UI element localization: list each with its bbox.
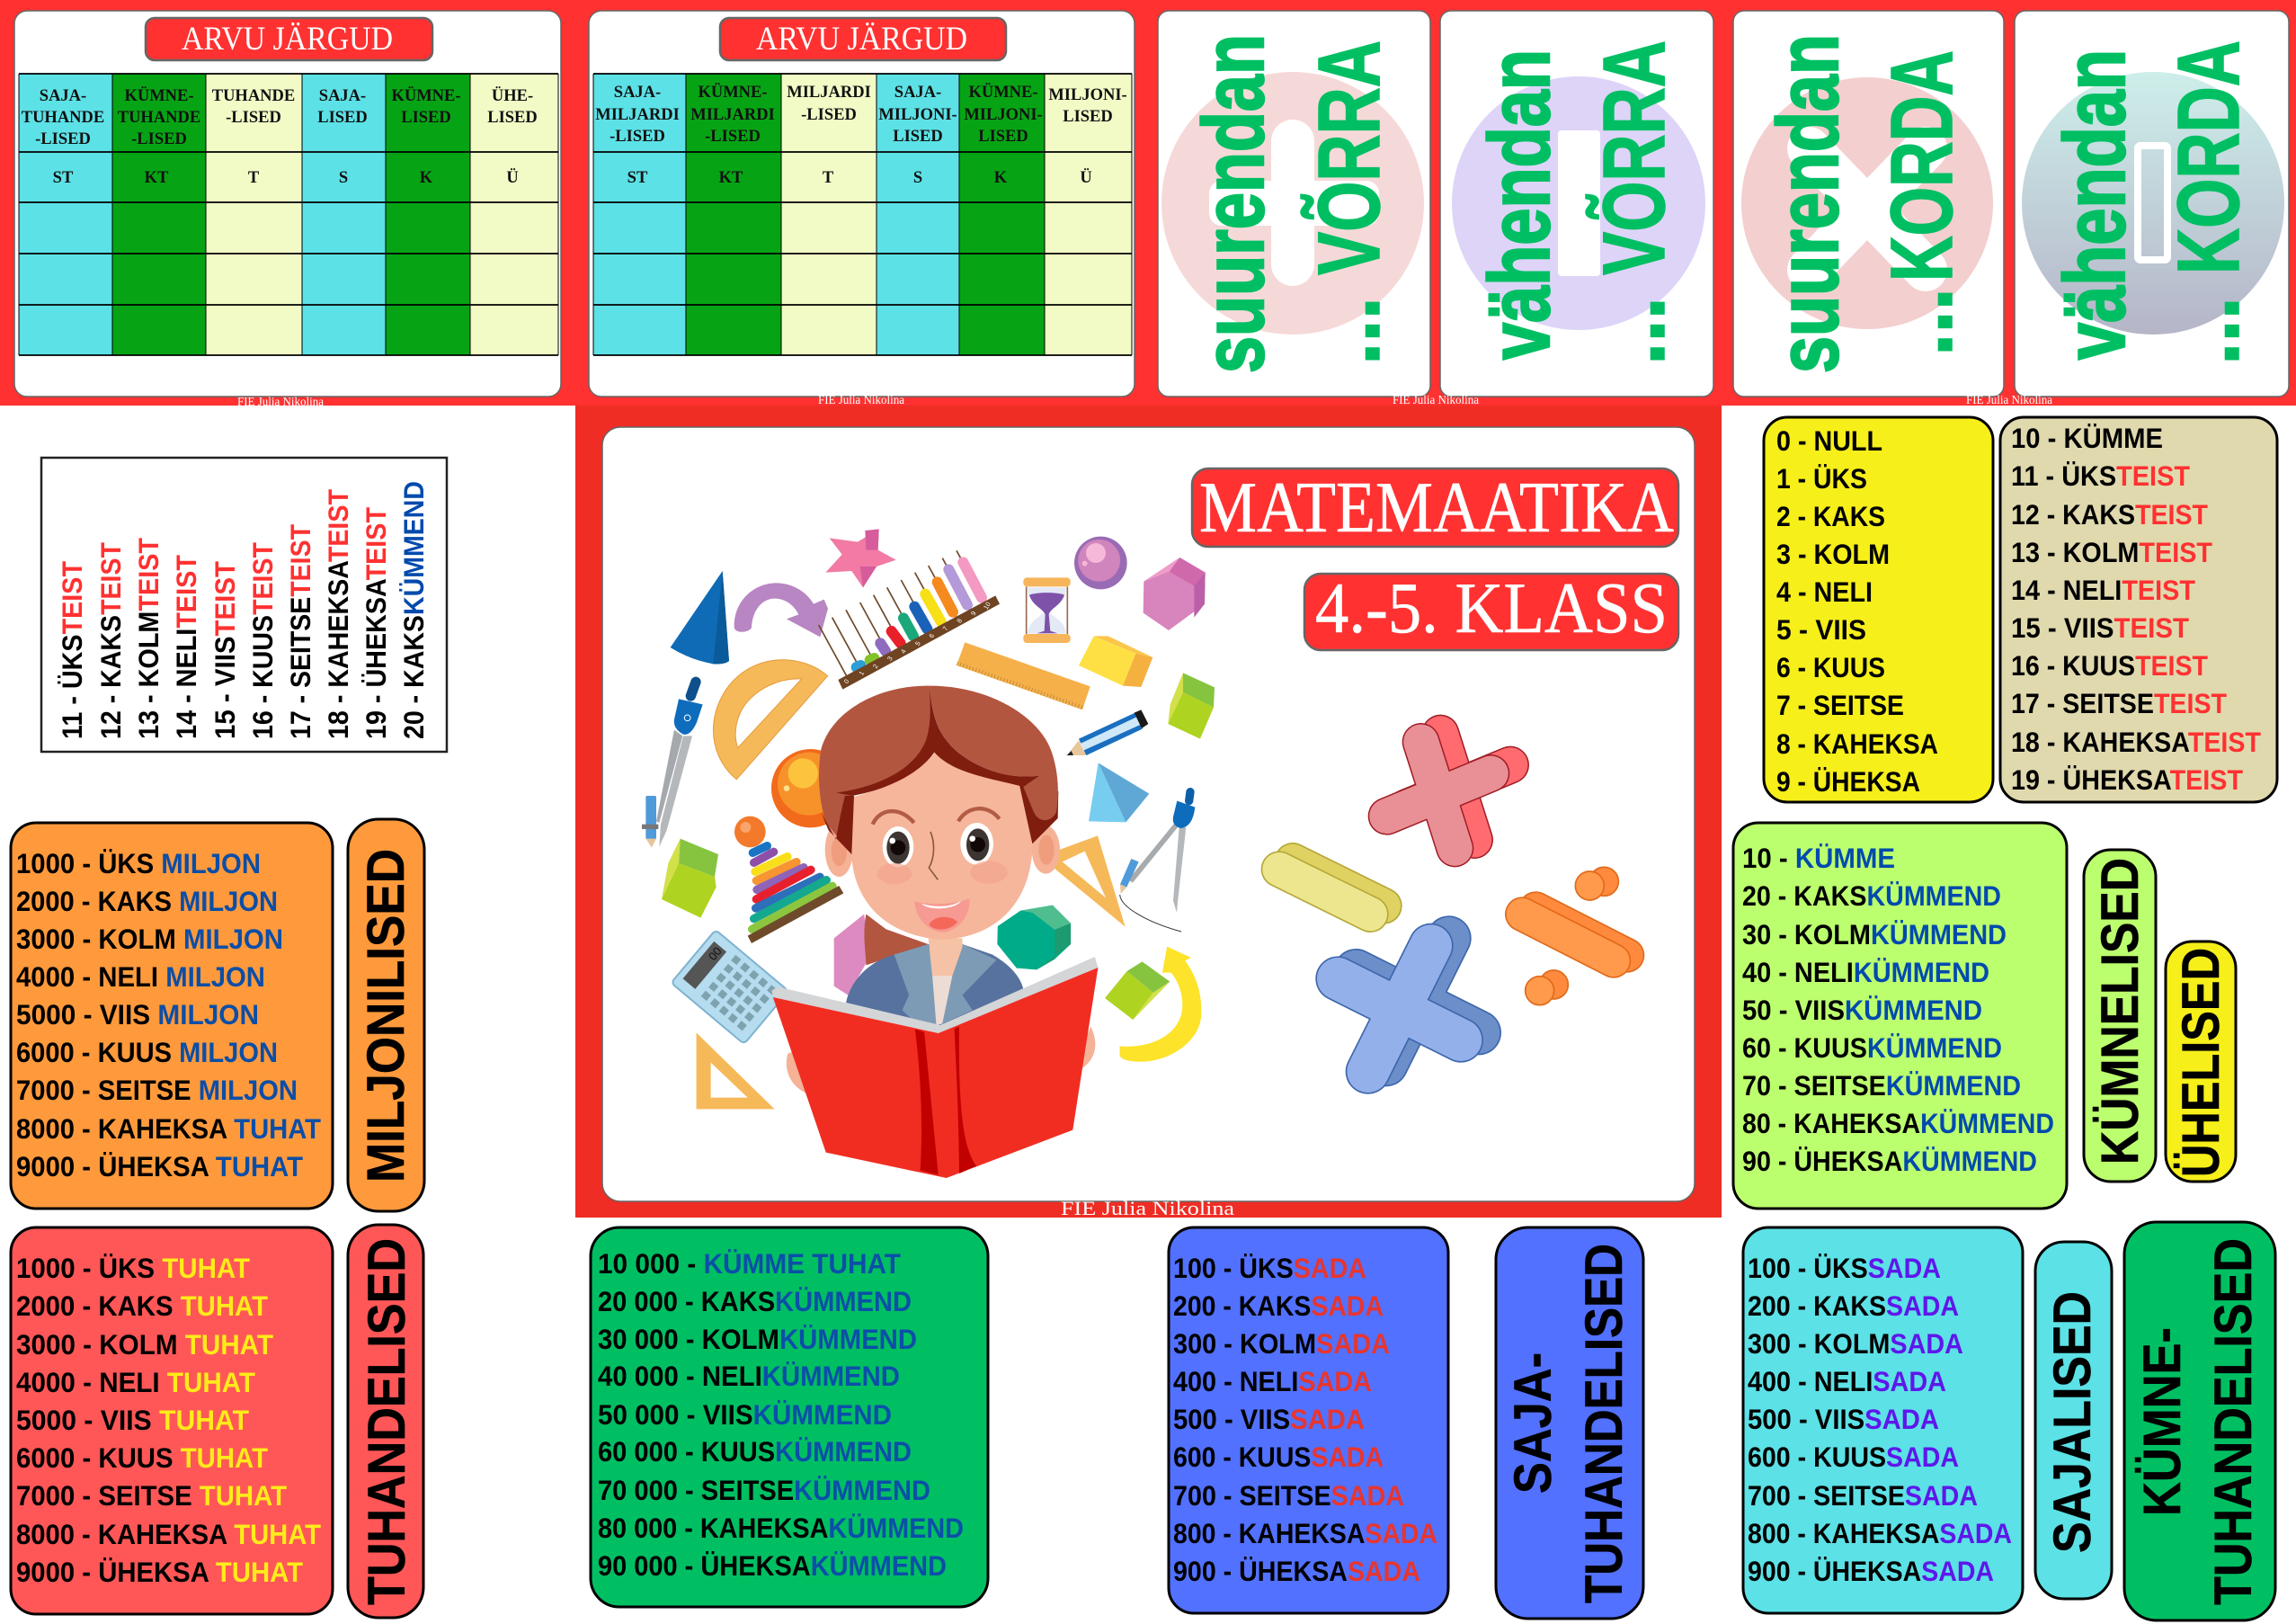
label: sajalised <box>2035 1242 2112 1599</box>
panel: millions list: 3000 - KOLM MILJON <box>16 923 283 955</box>
panel: units list: 9 - ÜHEKSA <box>1776 765 1920 798</box>
face <box>851 753 1032 940</box>
icon: abacus: 8 <box>955 617 964 624</box>
icon: green cube bottom <box>1105 961 1170 1020</box>
table: thousands place values: LISED <box>401 109 451 127</box>
table: billions place values: SAJA- <box>614 84 661 102</box>
icon: yellow box <box>1079 636 1152 687</box>
card: suurendan vorra: ... <box>1300 297 1398 365</box>
panel: teens list khaki: 18 - KAHEKSATEIST <box>2011 726 2261 758</box>
panel: hundreds list blue: 500 - VIISSADA <box>1173 1403 1365 1435</box>
table: thousands place values: SAJA- <box>319 87 366 105</box>
cheeks <box>877 861 1008 884</box>
panel: units list: 8 - KAHEKSA <box>1776 727 1938 760</box>
label: saja-tuhandelised: SAJA- <box>1504 1352 1562 1494</box>
panel: hundreds list blue: 200 - KAKSSADA <box>1173 1289 1384 1322</box>
panel: units list: 4 - NELI <box>1776 576 1873 608</box>
icon: red plus <box>1387 734 1510 848</box>
panel: rotated teens list: 13 - KOLMTEIST <box>132 538 165 739</box>
table: thousands place values: ST <box>53 169 74 187</box>
panel: thousands list: 8000 - KAHEKSA TUHAT <box>16 1518 321 1550</box>
label: uhelised: ÜHELISED <box>2172 948 2230 1177</box>
icon: blue times <box>1338 938 1479 1072</box>
panel: hundreds list blue: 800 - KAHEKSASADA <box>1173 1517 1437 1549</box>
table: thousands place values: -LISED <box>131 130 187 148</box>
panel: millions list: 1000 - ÜKS MILJON <box>16 847 261 879</box>
panel: units list: 0 - NULL <box>1776 424 1882 457</box>
title: matemaatika: MATEMAATIKA <box>1199 468 1674 548</box>
panel: units list: 2 - KAKS <box>1776 500 1885 532</box>
panel: tens list: 10 - KÜMME <box>1742 842 1895 874</box>
panel: millions list: 9000 - ÜHEKSA TUHAT <box>16 1150 303 1182</box>
table: billions place values: S <box>913 169 922 187</box>
panel: teens list khaki: 11 - ÜKSTEIST <box>2011 460 2190 492</box>
panel: rotated teens list: 17 - SEITSETEIST <box>284 524 316 739</box>
table: thousands place values: K <box>420 169 433 187</box>
panel: hundreds list cyan: 800 - KAHEKSASADA <box>1748 1517 2012 1549</box>
table: thousands place values: LISED <box>317 109 368 127</box>
panel: ten thousands list: 10 000 - KÜMME TUHAT <box>598 1247 901 1280</box>
panel: hundreds list blue <box>1169 1227 1448 1613</box>
panel: millions list: 7000 - SEITSE MILJON <box>16 1074 298 1106</box>
panel: millions list <box>11 823 333 1209</box>
table: billions place values: LISED <box>893 128 943 146</box>
icon: ruler <box>957 642 1090 709</box>
icon: abacus: 4 <box>899 647 908 655</box>
label: sajalised: SAJALISED <box>2043 1291 2102 1553</box>
table: billions place values: LISED <box>978 128 1028 146</box>
panel: tens list: 40 - NELIKÜMMEND <box>1742 956 1989 988</box>
panel: thousands list <box>11 1227 333 1614</box>
panel: rotated teens list <box>41 458 447 752</box>
panel: rotated teens list: 18 - KAHEKSATEIST <box>322 489 354 739</box>
table: thousands place values: Ü <box>506 168 519 187</box>
icon: abacus <box>819 550 1000 690</box>
table: billions place values: KT <box>719 169 743 187</box>
label: saja-tuhandelised: TUHANDELISED <box>1575 1244 1633 1603</box>
panel: millions list: 6000 - KUUS MILJON <box>16 1036 278 1068</box>
table: billions place values: MILJARDI <box>690 106 775 124</box>
icon: pyramid <box>1089 763 1149 822</box>
panel: hundreds list cyan: 700 - SEITSESADA <box>1748 1479 1978 1512</box>
jacket <box>846 938 1023 1025</box>
icon: abacus: 3 <box>885 655 894 662</box>
icon: yellow arrow <box>1120 947 1201 1062</box>
panel: hundreds list cyan: 600 - KUUSSADA <box>1748 1441 1959 1473</box>
table: thousands place values: SAJA- <box>40 87 86 105</box>
panel: ten thousands list: 50 000 - VIISKÜMMEND <box>598 1398 892 1431</box>
panel: tens list: 50 - VIISKÜMMEND <box>1742 994 1982 1026</box>
icon: calculator <box>672 930 788 1044</box>
panel: hundreds list blue: 700 - SEITSESADA <box>1173 1479 1404 1512</box>
panel: ten thousands list: 60 000 - KUUSKÜMMEND <box>598 1435 912 1468</box>
panel: hundreds list blue: 300 - KOLMSADA <box>1173 1327 1390 1360</box>
icon: orange divide <box>1522 867 1627 1005</box>
card: suurendan korda: ... <box>1873 288 1971 356</box>
subtitle: grade: 4.-5. KLASS <box>1315 569 1668 648</box>
title: arvu jargud: ARVU JÄRGUD <box>182 21 393 58</box>
panel: hundreds list cyan: 300 - KOLMSADA <box>1748 1327 1963 1360</box>
title: arvu jargud second: ARVU JÄRGUD <box>756 21 967 58</box>
table: thousands place values: S <box>339 169 348 187</box>
panel: hundreds list cyan: 200 - KAKSSADA <box>1748 1289 1959 1322</box>
panel: teens list khaki: 12 - KAKSTEIST <box>2011 498 2208 531</box>
icon: abacus: 9 <box>969 610 978 617</box>
panel: tens list: 90 - ÜHEKSAKÜMMEND <box>1742 1145 2037 1177</box>
panel: thousands list: 2000 - KAKS TUHAT <box>16 1289 268 1322</box>
icon: purple sphere <box>1074 537 1127 589</box>
table: billions place values: Ü <box>1080 168 1092 187</box>
panel: place value table thousands <box>0 0 574 409</box>
icon: purple arrow <box>734 583 828 637</box>
label: saja-tuhandelised <box>1496 1227 1643 1619</box>
table: billions place values: KÜMNE- <box>968 83 1038 102</box>
table: billions place values: SAJA- <box>894 84 941 102</box>
icon: abacus: 0 <box>842 678 850 685</box>
panel: teens list khaki: 13 - KOLMTEIST <box>2011 536 2212 568</box>
panel: rotated teens list: 15 - VIISTEIST <box>209 561 241 739</box>
icon: open red book <box>771 957 1098 1178</box>
panel: millions list: 5000 - VIIS MILJON <box>16 998 259 1031</box>
label: kumne-tuhandelised <box>2124 1222 2275 1620</box>
icon: pink hexagon <box>1144 558 1206 630</box>
icon: cone <box>671 571 729 665</box>
table: billions place values: -LISED <box>801 106 857 124</box>
panel: units list: 5 - VIIS <box>1776 613 1866 646</box>
icon: abacus: 2 <box>871 663 880 670</box>
table: billions place values: K <box>994 169 1008 187</box>
table: billions place values: MILJARDI <box>787 84 871 102</box>
table: billions place values: MILJONI- <box>878 106 957 124</box>
mouth <box>914 898 969 932</box>
panel: ten thousands list: 90 000 - ÜHEKSAKÜMMEND <box>598 1549 947 1582</box>
panel: multiply and divide cards <box>1722 0 2296 407</box>
panel: units list: 6 - KUUS <box>1776 651 1885 683</box>
panel: add and subtract cards <box>1142 0 1722 407</box>
nose <box>929 832 938 879</box>
panel: millions list: 8000 - KAHEKSA TUHAT <box>16 1112 321 1145</box>
panel: teens list khaki: 16 - KUUSTEIST <box>2011 649 2208 682</box>
label: kumne-tuhandelised: KÜMNE- <box>2133 1327 2192 1516</box>
icon: abacus: 1 <box>857 670 866 677</box>
icon: green cube <box>662 839 718 918</box>
label: tuhandelised: TUHANDELISED <box>358 1238 416 1605</box>
credit second: FIE Julia Nikolina <box>818 394 905 407</box>
panel: hundreds list cyan: 900 - ÜHEKSASADA <box>1748 1555 1994 1587</box>
panel: units list: 7 - SEITSE <box>1776 689 1904 721</box>
icon: compass drawing <box>1120 792 1195 932</box>
table: billions place values <box>593 74 1132 355</box>
panel: thousands list: 7000 - SEITSE TUHAT <box>16 1479 287 1512</box>
icon: abacus: 10 <box>982 601 992 611</box>
panel: tens list: 80 - KAHEKSAKÜMMEND <box>1742 1107 2054 1139</box>
icon: compass <box>642 682 703 848</box>
table: thousands place values: -LISED <box>226 109 281 127</box>
icon: yellow minus <box>1279 861 1384 915</box>
table: billions place values: ST <box>627 169 648 187</box>
label: miljonilised: MILJONILISED <box>357 849 415 1182</box>
panel: millions list: 2000 - KAKS MILJON <box>16 885 278 917</box>
table: thousands place values: T <box>248 169 260 187</box>
panel: rotated teens list: 12 - KAKSTEIST <box>94 542 127 739</box>
table: billions place values: MILJONI- <box>1048 86 1127 104</box>
panel: place value table billions <box>574 0 1142 407</box>
panel: units list: 1 - ÜKS <box>1776 462 1867 495</box>
panel: ten thousands list: 80 000 - KAHEKSAKÜMMEND <box>598 1512 964 1544</box>
icon: protractor <box>713 660 828 780</box>
panel: ten thousands list: 30 000 - KOLMKÜMMEND <box>598 1323 917 1355</box>
hair <box>819 686 1058 854</box>
panel: rotated teens list: 16 - KUUSTEIST <box>246 542 279 739</box>
panel: hundreds list cyan: 500 - VIISSADA <box>1748 1403 1939 1435</box>
table: thousands place values: TUHANDE <box>22 109 104 127</box>
panel: hundreds list blue: 600 - KUUSSADA <box>1173 1441 1384 1473</box>
panel: rotated teens list: 20 - KAKSKÜMMEND <box>397 481 430 739</box>
icon: ring tower <box>734 816 843 943</box>
icon: set square bottom <box>697 1032 775 1109</box>
table: thousands place values: LISED <box>487 109 538 127</box>
panel: thousands list: 1000 - ÜKS TUHAT <box>16 1252 250 1284</box>
panel: thousands list: 5000 - VIIS TUHAT <box>16 1404 249 1436</box>
icon: calculator: 00 <box>706 944 725 963</box>
panel: thousands list: 3000 - KOLM TUHAT <box>16 1328 273 1361</box>
table: billions place values: LISED <box>1063 108 1113 126</box>
panel: teens list khaki: 19 - ÜHEKSATEIST <box>2011 763 2243 796</box>
panel: ten thousands list: 20 000 - KAKSKÜMMEND <box>598 1285 912 1317</box>
panel: rotated teens list: 14 - NELITEIST <box>170 555 202 739</box>
panel: hundreds list blue: 100 - ÜKSSADA <box>1173 1252 1366 1284</box>
table: billions place values: MILJARDI <box>595 106 680 124</box>
panel: teens list khaki: 14 - NELITEIST <box>2011 574 2195 606</box>
panel: units list <box>1764 417 1993 802</box>
panel: ten thousands list: 70 000 - SEITSEKÜMMEND <box>598 1474 930 1506</box>
icon: abacus: 5 <box>913 640 922 647</box>
panel: teens list khaki: 10 - KÜMME <box>2011 422 2163 454</box>
card: vahendan korda: ... <box>2159 297 2257 365</box>
card: suurendan korda <box>1733 11 2004 397</box>
panel: tens list: 70 - SEITSEKÜMMEND <box>1742 1069 2021 1102</box>
panel: ten thousands list: 40 000 - NELIKÜMMEND <box>598 1360 900 1392</box>
illustration: math objects right <box>957 537 1215 932</box>
icon: hands <box>787 1027 1095 1094</box>
card: vahendan korda <box>2015 11 2289 397</box>
table: thousands place values: ÜHE- <box>492 86 533 105</box>
table: thousands place values: TUHANDE <box>118 109 200 127</box>
panel: tens list: 20 - KAKSKÜMMEND <box>1742 879 2001 912</box>
table: thousands place values: TUHANDE <box>212 87 295 105</box>
table: thousands place values <box>19 74 558 355</box>
icon: orange sphere <box>771 749 850 827</box>
panel: thousands list: 9000 - ÜHEKSA TUHAT <box>16 1556 303 1588</box>
illustration: girl with book lower part <box>697 906 1201 1178</box>
table: billions place values: -LISED <box>705 128 761 146</box>
credit fourth: FIE Julia Nikolina <box>1966 394 2053 407</box>
illustration: math objects left <box>642 529 1000 943</box>
icon: teal octagon <box>997 906 1071 969</box>
panel: rotated teens list: 19 - ÜHEKSATEIST <box>360 507 392 739</box>
eyebrows <box>873 808 1000 825</box>
panel: hundreds list blue: 900 - ÜHEKSASADA <box>1173 1555 1420 1587</box>
braid <box>864 915 929 965</box>
credit: FIE Julia Nikolina <box>237 396 325 409</box>
eyes <box>883 823 993 867</box>
credit cover: FIE Julia Nikolina <box>1061 1197 1234 1219</box>
table: thousands place values: -LISED <box>35 130 91 148</box>
panel: hundreds list cyan <box>1743 1227 2023 1613</box>
table: billions place values: T <box>823 169 834 187</box>
panel: millions list: 4000 - NELI MILJON <box>16 960 265 993</box>
panel: tens list: 30 - KOLMKÜMMEND <box>1742 918 2007 950</box>
illustration: math symbols <box>1279 734 1627 1072</box>
table: billions place values: -LISED <box>610 128 665 146</box>
table: thousands place values: KT <box>145 169 169 187</box>
table: thousands place values: KÜMNE- <box>391 86 461 105</box>
card: suurendan vorra <box>1158 11 1430 397</box>
icon: pencil <box>1067 709 1148 755</box>
panel: ten thousands list <box>591 1227 988 1607</box>
panel: tens list: 60 - KUUSKÜMMEND <box>1742 1031 2002 1064</box>
panel: hundreds list cyan: 400 - NELISADA <box>1748 1365 1946 1397</box>
panel: hundreds list blue: 400 - NELISADA <box>1173 1365 1372 1397</box>
icon: pink hexagon behind girl <box>834 915 870 995</box>
icon: abacus: 7 <box>941 625 949 632</box>
icon: set square <box>1052 835 1126 927</box>
icon: abacus: 6 <box>927 632 936 639</box>
icon: green cube right <box>1168 673 1215 739</box>
table: billions place values: MILJONI- <box>964 106 1043 124</box>
panel: central cover <box>575 406 1722 1219</box>
label: kumnelised: KÜMNELISED <box>2091 858 2149 1164</box>
panel: teens list khaki: 15 - VIISTEIST <box>2011 611 2189 644</box>
panel: thousands list: 4000 - NELI TUHAT <box>16 1366 255 1398</box>
panel: units list: 3 - KOLM <box>1776 538 1890 570</box>
table: thousands place values: KÜMNE- <box>124 86 194 105</box>
panel: hundreds list cyan: 100 - ÜKSSADA <box>1748 1252 1941 1284</box>
panel: teens list khaki: 17 - SEITSETEIST <box>2011 687 2227 719</box>
ears <box>825 823 1060 877</box>
credit third: FIE Julia Nikolina <box>1393 394 1480 407</box>
label: kumne-tuhandelised: TUHANDELISED <box>2204 1238 2263 1605</box>
card: vahendan vorra: ... <box>1585 297 1683 365</box>
panel: tens list <box>1733 823 2067 1209</box>
table: billions place values: KÜMNE- <box>698 83 768 102</box>
panel: thousands list: 6000 - KUUS TUHAT <box>16 1441 268 1474</box>
card: vahendan vorra <box>1440 11 1713 397</box>
icon: star <box>825 529 896 587</box>
panel: teens list khaki <box>2000 417 2277 802</box>
illustration: girl head <box>819 686 1060 940</box>
panel: rotated teens list: 11 - ÜKSTEIST <box>56 561 88 739</box>
icon: hourglass <box>1023 577 1071 643</box>
